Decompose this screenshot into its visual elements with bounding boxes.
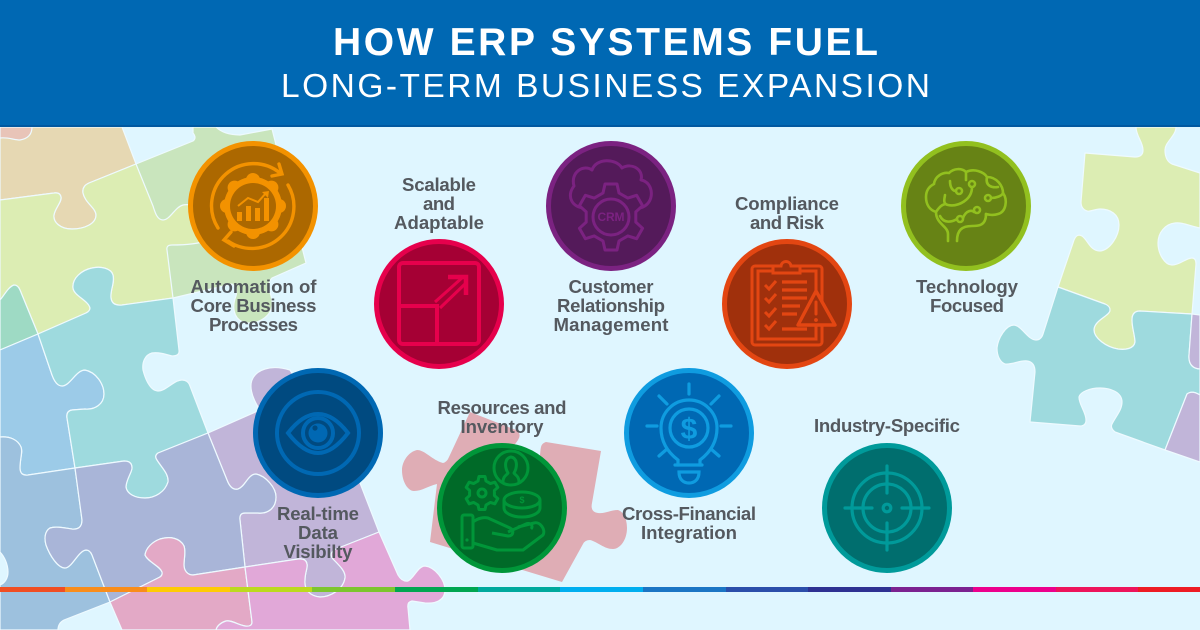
item: Scalable and Adaptable: [376, 174, 502, 366]
label: Automation of: [190, 276, 317, 297]
title: HOW ERP SYSTEMS FUEL: [333, 21, 878, 64]
rainbow bar: [0, 587, 1200, 592]
item: Compliance and Risk: [724, 193, 850, 366]
label: Processes: [209, 314, 298, 335]
title: [281, 21, 930, 105]
label: Relationship: [557, 295, 665, 316]
label: and: [423, 193, 455, 214]
label: Integration: [641, 522, 737, 543]
icon: dollar light bulb: [626, 370, 752, 496]
puzzle piece: centre: [402, 412, 627, 582]
icon: hand with gear, coin, person: $: [519, 495, 525, 505]
item: Real-time Data Visibilty: [256, 370, 380, 562]
item: Customer Relationship Management: [548, 144, 674, 335]
label: Cross-Financial: [622, 503, 756, 524]
icon: hand with gear, coin, person: [440, 446, 564, 570]
label: Visibilty: [284, 541, 353, 562]
icon: gear with chart: [190, 144, 316, 268]
title: LONG-TERM BUSINESS EXPANSION: [281, 68, 930, 105]
label: Adaptable: [394, 212, 484, 233]
item: Resources and Inventory: [438, 397, 566, 570]
icon: dollar light bulb: $: [681, 413, 698, 446]
icon: eye: [256, 370, 380, 496]
icon: clipboard with warning: [724, 242, 850, 366]
puzzle pieces: left cluster: [0, 127, 445, 630]
header band: [0, 0, 1200, 127]
label: Core Business: [190, 295, 316, 316]
label: Compliance: [735, 193, 839, 214]
label: Inventory: [460, 416, 544, 437]
label: and Risk: [750, 212, 825, 233]
label: Focused: [930, 295, 1004, 316]
label: Industry-Specific: [814, 415, 960, 436]
label: Real-time: [277, 503, 359, 524]
icon: scaling square: [376, 242, 502, 366]
item: Technology Focused: [904, 144, 1028, 316]
icon: CRM cloud gear: [548, 144, 674, 268]
icon: CRM cloud gear: CRM: [598, 210, 624, 224]
icon: circuit brain: [904, 144, 1028, 268]
label: Technology: [916, 276, 1019, 297]
label: Management: [554, 314, 668, 335]
item: Automation of Core Business Processes: [190, 144, 317, 335]
item: Industry-Specific: [814, 415, 960, 570]
puzzle pieces: right cluster: [997, 127, 1200, 462]
label: Data: [298, 522, 339, 543]
label: Resources and: [438, 397, 566, 418]
label: Customer: [568, 276, 654, 297]
label: Scalable: [402, 174, 476, 195]
icon: target crosshair: [824, 446, 950, 570]
item: Cross-Financial Integration: [622, 370, 756, 543]
